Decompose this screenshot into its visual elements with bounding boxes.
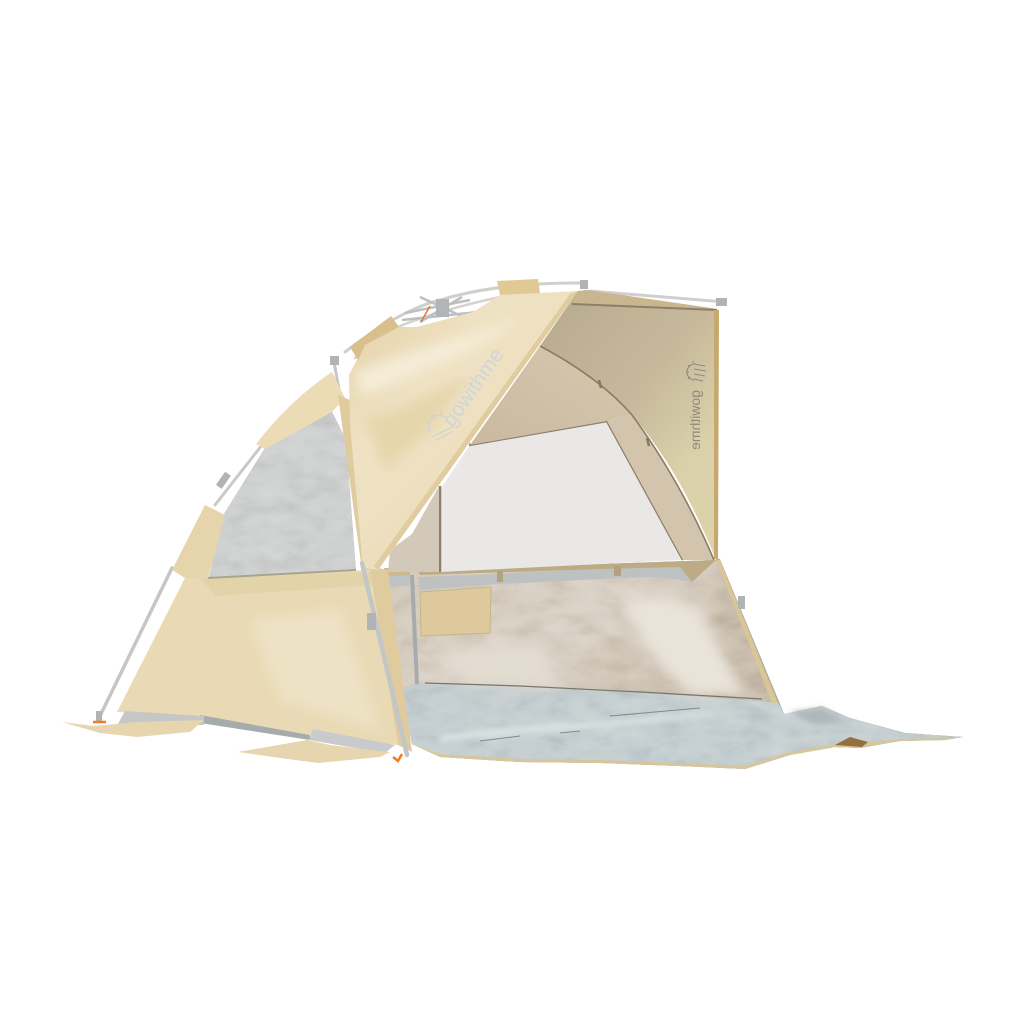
front strip bbox=[338, 395, 412, 752]
storage pocket bbox=[420, 587, 491, 636]
back window bbox=[440, 421, 681, 572]
logo: right canopy bbox=[686, 361, 706, 450]
pole: top second arc bbox=[355, 294, 540, 358]
icon: sun mark front bbox=[425, 411, 454, 440]
left side band bbox=[172, 505, 225, 578]
back wall bbox=[380, 560, 778, 703]
front canopy panel bbox=[349, 291, 578, 570]
lower side panel bbox=[117, 570, 398, 745]
hub mechanism bbox=[402, 297, 478, 322]
pole: upper front leg bbox=[334, 362, 340, 395]
logo: front panel bbox=[425, 344, 509, 440]
left side wall bbox=[117, 372, 398, 745]
frame poles bbox=[100, 283, 782, 716]
roof patch top bbox=[497, 279, 540, 295]
side mesh window bbox=[209, 412, 356, 577]
left interior panel bbox=[388, 486, 439, 572]
overhang canopy bbox=[540, 290, 719, 561]
orange pegs bbox=[93, 722, 402, 761]
right peg flap bbox=[238, 729, 395, 763]
left peg flap bbox=[62, 711, 204, 737]
pole connectors bbox=[96, 280, 745, 723]
icon: sun mark right bbox=[686, 361, 706, 381]
wordmark front: gowithme bbox=[438, 344, 509, 431]
window frame bbox=[440, 421, 683, 572]
inner tan roof bbox=[470, 346, 632, 445]
wordmark right: gowithme bbox=[687, 390, 703, 450]
inner side band bbox=[607, 415, 714, 560]
roof patch left bbox=[350, 316, 399, 360]
upper side band bbox=[256, 372, 345, 449]
pole: front leg bbox=[362, 563, 407, 755]
pole: rear arc bbox=[590, 291, 725, 302]
pole: side window gap bbox=[215, 445, 262, 505]
under-panel shadow strip bbox=[200, 715, 310, 740]
pole: right guy bbox=[719, 560, 782, 712]
rolled side sill bbox=[384, 560, 716, 590]
pole: left guy bbox=[100, 568, 172, 716]
ground sheet bbox=[400, 683, 963, 769]
pole: top front arc bbox=[345, 283, 585, 352]
